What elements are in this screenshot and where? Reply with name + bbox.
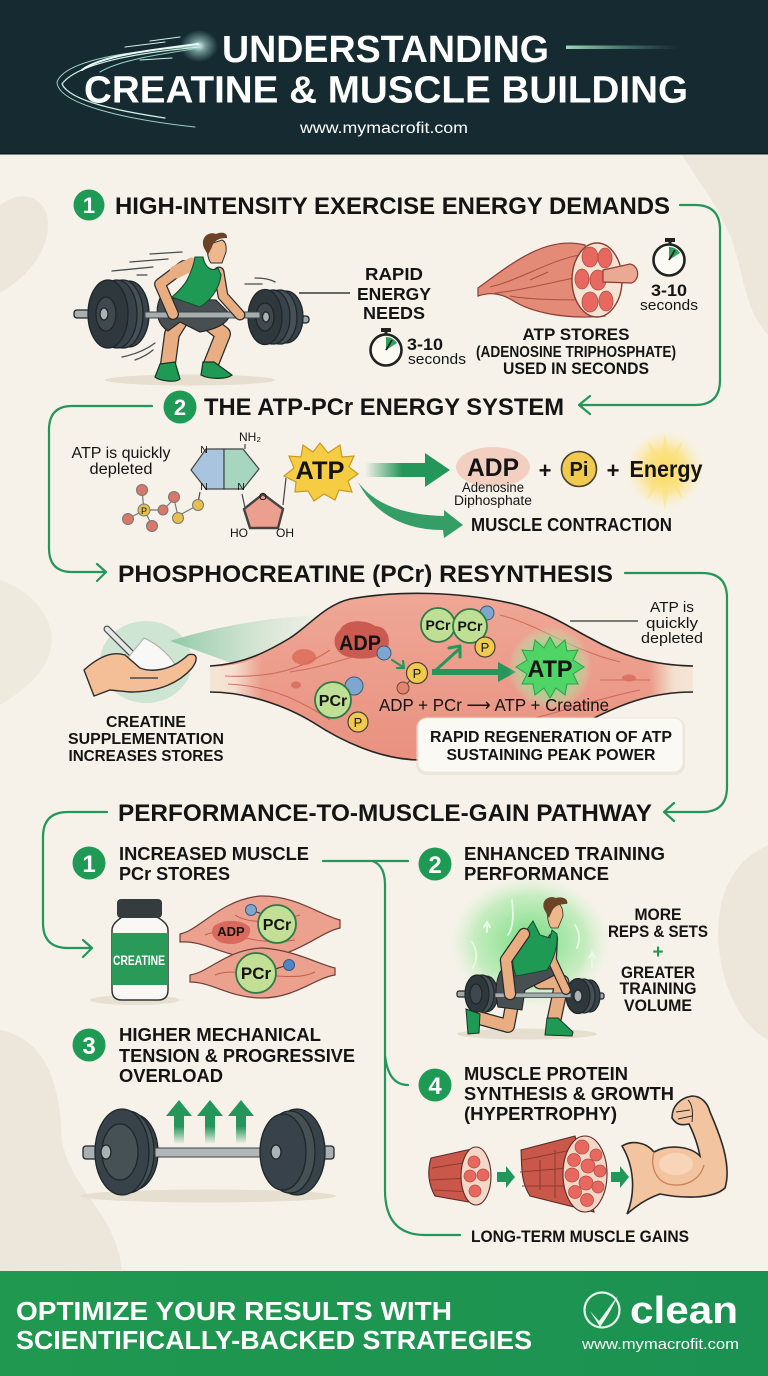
- arrow to ADP: [365, 453, 450, 487]
- step 1: 1: [82, 851, 96, 878]
- PCr molecule: [315, 677, 368, 732]
- step 4: MUSCLE PROTEIN: [464, 1063, 628, 1084]
- heading 1: 1: [83, 193, 95, 218]
- logo: [581, 1290, 739, 1353]
- title: CREATINE & MUSCLE BUILDING: [84, 70, 688, 112]
- step 2: PERFORMANCE: [464, 863, 609, 884]
- icon: kneeling lifter: [450, 876, 610, 1040]
- step 4: SYNTHESIS & GROWTH: [464, 1083, 674, 1104]
- PCr pair: PCr: [426, 617, 451, 633]
- rapid energy label: NEEDS: [363, 303, 425, 323]
- callout: [416, 718, 685, 775]
- atp depleted note: ATP is: [650, 599, 694, 616]
- icon: ATP burst: ATP: [296, 457, 344, 485]
- title: [84, 29, 688, 112]
- icon: barbell with arrows: [80, 1100, 336, 1202]
- connector lines: [43, 205, 727, 1235]
- far arm: [552, 938, 566, 990]
- more reps label: VOLUME: [624, 997, 692, 1015]
- header band: [0, 0, 768, 154]
- ADP products: Diphosphate: [454, 493, 532, 508]
- icon: ATP burst: [284, 443, 358, 501]
- rapid energy label: RAPID: [365, 264, 423, 284]
- timing label: [407, 335, 466, 368]
- icon: ATP molecule: OH: [276, 526, 294, 540]
- kneeling bar: [495, 993, 571, 998]
- PCr pair: [421, 606, 495, 657]
- heading 3: PHOSPHOCREATINE (PCr) RESYNTHESIS: [118, 561, 613, 588]
- legs: [168, 318, 223, 364]
- rapid energy label: [299, 264, 431, 323]
- green ATP burst: ATP: [528, 656, 572, 683]
- section 4: pathway: [72, 800, 727, 1246]
- atp stores label: (ADENOSINE TRIPHOSPHATE): [476, 344, 676, 361]
- ADP cloud: ADP: [339, 632, 381, 655]
- footer band: [0, 1271, 768, 1376]
- more reps label: +: [652, 942, 664, 963]
- atp depleted note: depleted: [641, 630, 703, 647]
- ADP products: +: [607, 458, 619, 483]
- creatine label: INCREASES STORES: [68, 748, 224, 765]
- muscle diagram: [210, 593, 703, 760]
- callout: RAPID REGENERATION OF ATP: [430, 729, 672, 746]
- step 2: 2: [428, 852, 442, 879]
- PCr molecule: PCr: [319, 693, 347, 710]
- green ATP burst: [508, 626, 592, 710]
- atp note: ATP is quickly: [72, 445, 171, 462]
- icon: ATP molecule: P: [141, 506, 147, 516]
- heading 1: HIGH-INTENSITY EXERCISE ENERGY DEMANDS: [115, 193, 670, 220]
- shoes: [155, 362, 180, 381]
- step 2: ENHANCED TRAINING: [464, 843, 665, 864]
- icon: lifter with barbell: [74, 233, 309, 386]
- step 3: TENSION & PROGRESSIVE: [119, 1045, 355, 1066]
- icon: ATP molecule: N: [237, 481, 245, 493]
- atp depleted note: quickly: [646, 615, 699, 632]
- barbell plates: [83, 1109, 158, 1195]
- equation: ADP + PCr ⟶ ATP + Creatine: [379, 695, 609, 715]
- heading 2: 2: [174, 395, 186, 420]
- title: UNDERSTANDING: [222, 29, 549, 71]
- step 3: HIGHER MECHANICAL: [119, 1024, 321, 1045]
- ADP products: +: [539, 458, 551, 483]
- icon: muscle with PCr: [190, 948, 335, 998]
- more reps label: MORE: [634, 906, 682, 924]
- icon: ATP molecule: NH₂: [239, 430, 261, 444]
- icon: muscle with PCr: PCr: [241, 964, 271, 983]
- ADP cloud: [335, 621, 391, 660]
- atp stores label: ATP STORES: [522, 325, 630, 344]
- PCr molecule: P: [354, 715, 362, 730]
- kneeling legs: [479, 982, 562, 1026]
- atp note: [72, 445, 171, 478]
- icon: muscle with ADP and PCr: ADP: [217, 924, 245, 939]
- creatine label: CREATINE: [106, 714, 186, 731]
- ADP products: ADP: [467, 454, 519, 482]
- section 3: phosphocreatine resynthesis: [68, 561, 703, 775]
- step 3: [72, 1024, 355, 1086]
- step 2: [418, 843, 665, 884]
- energy burst: Energy: [630, 456, 703, 482]
- creatine label: [68, 714, 224, 765]
- rapid energy label: ENERGY: [357, 284, 431, 304]
- atp stores label: [476, 325, 676, 378]
- footer message: [16, 1296, 532, 1355]
- icon: muscle with ADP and PCr: [180, 896, 340, 958]
- curved arrow to muscle contraction: [358, 482, 463, 538]
- more reps label: REPS & SETS: [608, 923, 708, 941]
- torso: [172, 257, 221, 307]
- timing label: 3-10: [407, 335, 443, 354]
- step 1: INCREASED MUSCLE: [119, 843, 309, 864]
- icon: stopwatch: [370, 328, 402, 366]
- more reps label: GREATER: [621, 964, 695, 982]
- long-term label: LONG-TERM MUSCLE GAINS: [471, 1227, 689, 1246]
- icon: small muscle fibre: [429, 1147, 491, 1205]
- more reps label: TRAINING: [620, 980, 696, 998]
- logo: www.mymacrofit.com: [581, 1336, 739, 1353]
- plate left: [457, 975, 498, 1013]
- P molecule: P: [413, 666, 421, 681]
- step 4: 4: [428, 1073, 442, 1100]
- growth arrow 1: [497, 1166, 515, 1188]
- timing label 2: 3-10: [651, 281, 687, 300]
- timing label 2: seconds: [640, 297, 698, 314]
- icon: muscle bundle: [478, 243, 638, 317]
- atp note: depleted: [90, 461, 152, 478]
- icon: creatine in hand: [84, 615, 325, 703]
- icon: creatine bottle: CREATINE: [113, 953, 165, 968]
- muscle contraction: MUSCLE CONTRACTION: [471, 515, 672, 535]
- step 1: PCr STORES: [119, 863, 230, 884]
- up arrows: [166, 1100, 254, 1144]
- step 3: 3: [82, 1033, 96, 1060]
- heading 4: PERFORMANCE-TO-MUSCLE-GAIN PATHWAY: [118, 800, 652, 827]
- PCr pair: PCr: [458, 618, 483, 634]
- plate right: [566, 978, 604, 1014]
- reaction arrows: [392, 646, 460, 670]
- creatine label: SUPPLEMENTATION: [68, 731, 224, 748]
- head: [207, 240, 226, 263]
- section 2: ATP-PCr system: [72, 390, 705, 540]
- more reps label: [608, 906, 708, 1015]
- icon: ATP molecule: N: [200, 481, 208, 493]
- ADP products: Adenosine: [462, 480, 524, 495]
- kneeling torso: [513, 921, 557, 976]
- callout: SUSTAINING PEAK POWER: [446, 747, 656, 764]
- icon: muscle with ADP and PCr: PCr: [263, 917, 291, 934]
- right plates: [248, 290, 309, 344]
- timing label: seconds: [408, 351, 466, 368]
- website: www.mymacrofit.com: [299, 120, 468, 137]
- footer message: SCIENTIFICALLY-BACKED STRATEGIES: [16, 1325, 532, 1355]
- footer message: OPTIMIZE YOUR RESULTS WITH: [16, 1296, 452, 1326]
- energy burst: [625, 430, 705, 511]
- swoosh decoration: [57, 30, 218, 127]
- PCr pair: P: [481, 640, 489, 655]
- atp depleted note: [570, 599, 703, 647]
- icon: ATP molecule: O: [259, 491, 267, 503]
- arms: [160, 264, 240, 315]
- icon: ATP molecule: N: [200, 444, 208, 456]
- icon: flexed arm: [622, 1096, 727, 1214]
- icon: stopwatch 2: [654, 238, 684, 276]
- step 3: OVERLOAD: [119, 1065, 223, 1086]
- icon: ATP molecule: [122, 430, 294, 540]
- step 4: (HYPERTROPHY): [464, 1103, 617, 1124]
- icon: ATP molecule: HO: [230, 526, 248, 540]
- step 4: [418, 1063, 674, 1124]
- growth arrow 2: [611, 1166, 629, 1188]
- step 1: [72, 843, 309, 884]
- logo: clean: [630, 1290, 738, 1332]
- bar: [145, 312, 260, 318]
- icon: creatine bottle: [90, 899, 180, 1005]
- left plates: [74, 280, 149, 348]
- ADP products: [454, 447, 619, 508]
- icon: large muscle fibre: [520, 1136, 607, 1212]
- timing label 2: [640, 281, 698, 314]
- ADP products: Pi: [570, 459, 588, 481]
- atp stores label: USED IN SECONDS: [503, 360, 649, 378]
- heading 2: THE ATP-PCr ENERGY SYSTEM: [204, 394, 564, 421]
- section 1: high-intensity exercise: [74, 190, 698, 386]
- P molecule: [397, 662, 428, 694]
- green accent line: [566, 46, 678, 49]
